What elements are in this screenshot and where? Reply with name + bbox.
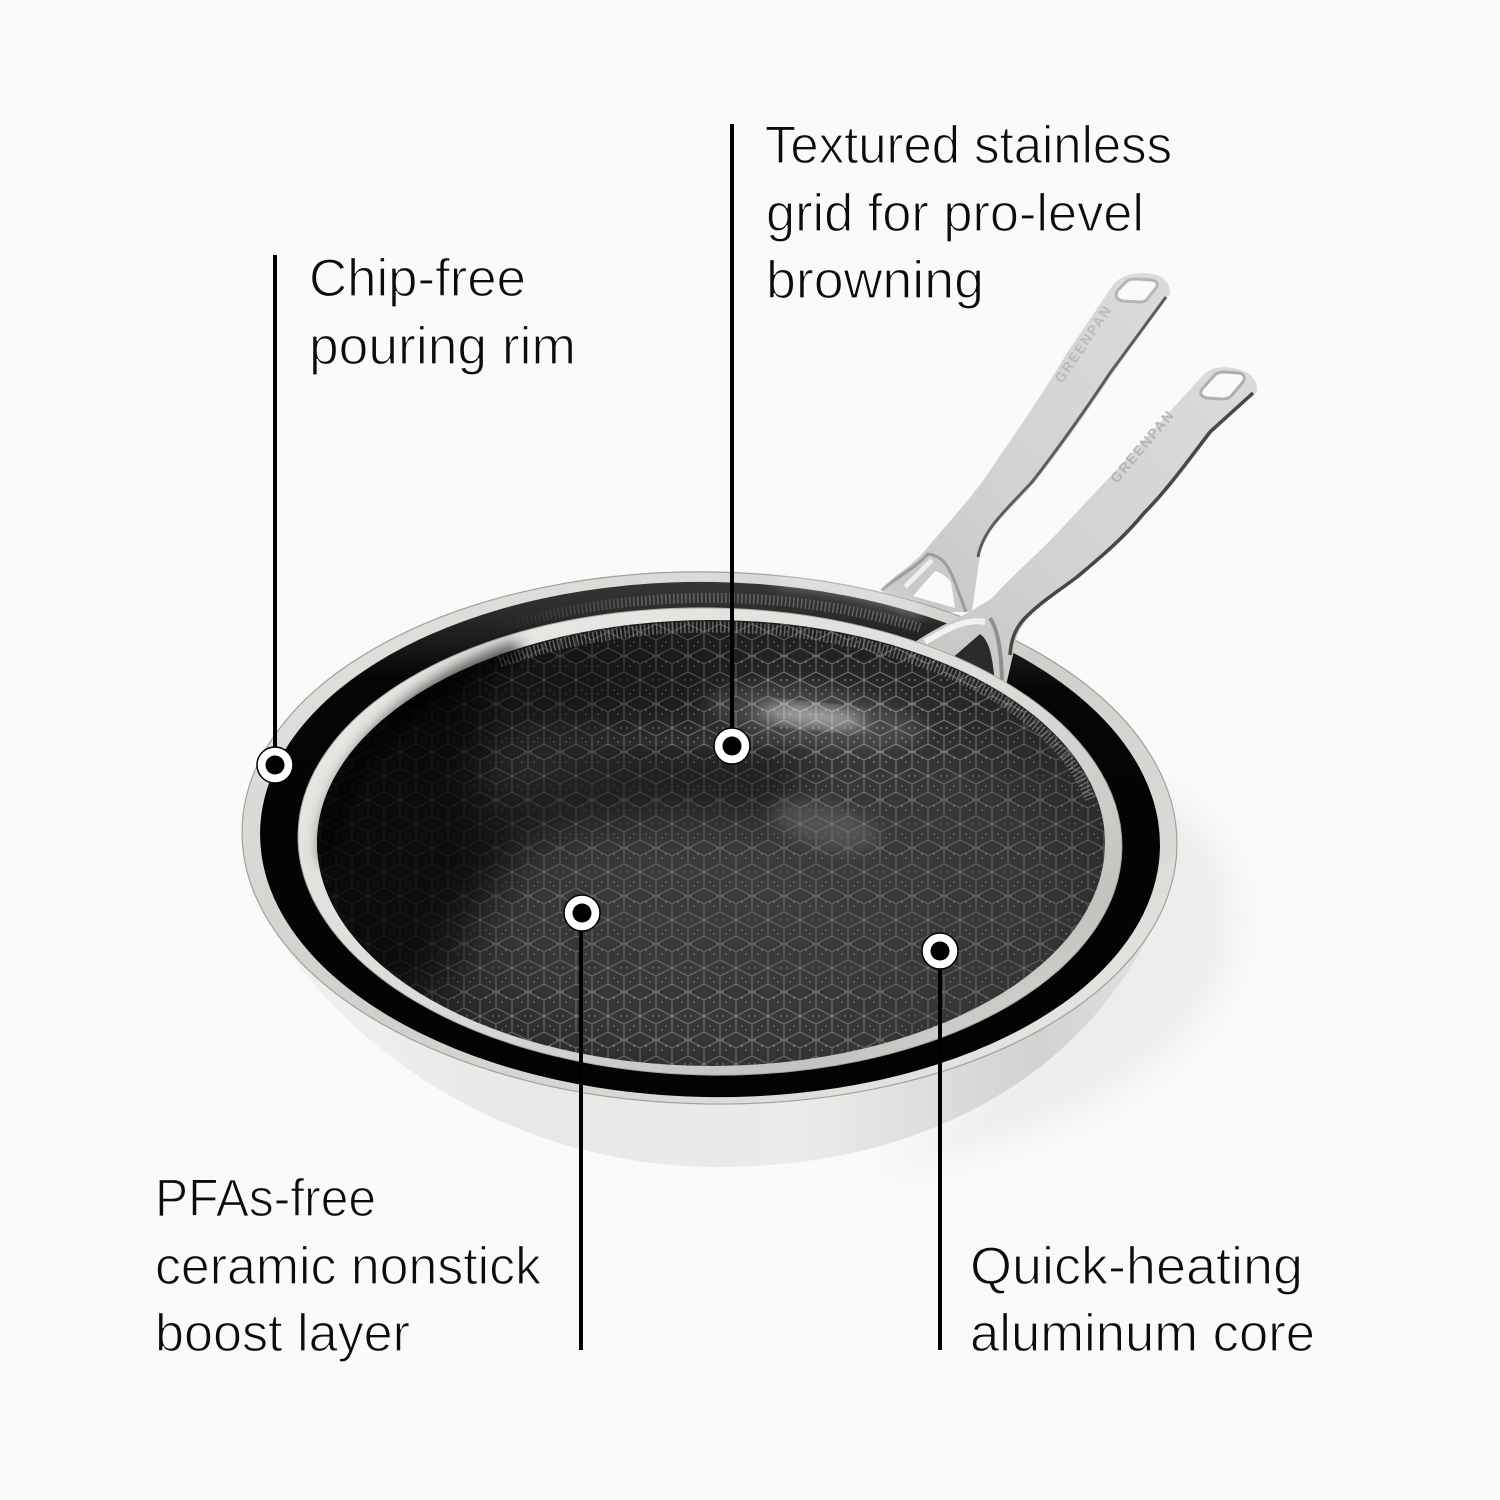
darker left shading [317,665,518,1009]
leader line [730,124,734,746]
label: pouring rim [309,317,576,376]
small pan rim [294,601,1126,1082]
label: ceramic nonstick [155,1237,541,1296]
label [970,1237,1315,1363]
front pan handle [915,367,1257,690]
pan shadow [880,790,1235,1165]
specular highlight [756,701,868,731]
label: PFAs-free [155,1169,376,1228]
marker [257,747,293,783]
engraved logo: GREENPAN [1107,406,1177,486]
marker [564,895,600,931]
hanging hole [1201,372,1244,399]
lighter patches [770,796,879,852]
dark interior band [256,574,1164,1105]
label: Quick-heating [970,1237,1303,1296]
engraved logo: GREENPAN [1051,302,1115,386]
label: browning [766,251,984,310]
leader line [938,951,942,1350]
marker [922,933,958,969]
bracket opening [913,571,955,608]
rim highlight [780,578,920,612]
leader line [579,913,583,1350]
brighter grid zones [480,632,1018,1064]
label [309,249,576,376]
knurled edge [500,627,1090,799]
label [155,1169,541,1363]
callout: ceramic [155,895,600,1363]
label: aluminum core [970,1304,1315,1363]
hanging hole [1116,279,1157,302]
large pan rim [237,564,1182,1112]
label: Textured stainless [765,116,1172,175]
callout: core [922,933,1315,1363]
label: grid for pro-level [766,184,1144,243]
cooking surface [310,620,1105,1066]
callout: rim [257,249,576,783]
label [765,116,1172,310]
leader line [273,255,277,765]
basin shadow [470,780,800,890]
knurled rim texture large pan [500,598,920,628]
label: boost layer [155,1304,410,1363]
large pan body [243,860,1177,1167]
pan illustration [237,273,1257,1167]
bracket opening [950,634,995,690]
hexagon grid texture [300,610,1120,1080]
callout: grid [714,116,1172,764]
rear pan handle [880,273,1170,612]
label: Chip-free [309,249,526,308]
marker [714,728,750,764]
